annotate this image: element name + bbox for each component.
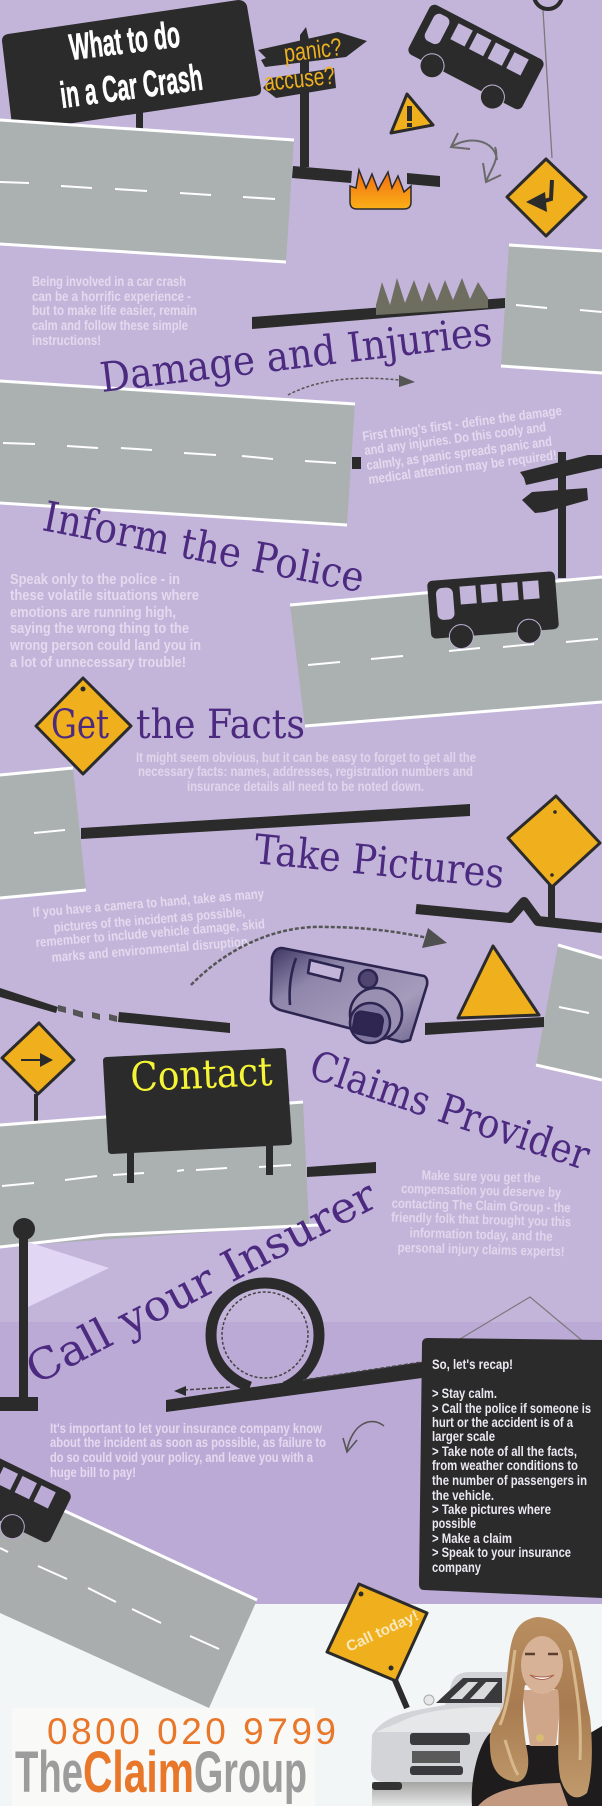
text: first thing's first: First thing's first - define the damage — [361, 403, 563, 444]
recap text: larger scale — [432, 1429, 495, 1444]
title text: What to do — [67, 14, 182, 68]
heading: Inform the Police: Inform the Police — [39, 492, 368, 602]
signpost: panic / accuse — [258, 27, 367, 167]
sign text: panic? — [282, 33, 343, 68]
recap text: > Take note of all the facts, — [432, 1444, 577, 1459]
diamond sign with post — [508, 796, 600, 918]
hanging string and ring — [534, 0, 562, 158]
recap text: > Speak to your insurance — [432, 1545, 571, 1560]
text: take pictures — [32, 886, 265, 965]
intro text: can be a horrific experience - — [32, 289, 191, 304]
recap text: company — [432, 1560, 481, 1575]
recap text: possible — [432, 1516, 476, 1531]
flag — [0, 1218, 109, 1411]
text: take pictures: pictures of the incident as possible, — [53, 904, 246, 935]
photo: woman — [472, 1617, 602, 1806]
bus: top tilted — [401, 3, 546, 122]
signpost silhouette — [520, 452, 602, 578]
text: speak to police: a lot of unnecessary trouble! — [10, 654, 186, 671]
orange triangle and ground — [425, 946, 544, 1035]
logo: The Claim Group — [15, 1740, 307, 1805]
text: first thing's first: medical attention may be required! — [367, 447, 558, 487]
call today sign — [327, 1584, 427, 1708]
road 5 — [0, 768, 86, 898]
heading: Take Pictures: Take Pictures — [252, 825, 507, 898]
text: first thing's first: calmly, as panic spreads panic and — [365, 434, 553, 473]
heading: Get the Facts: Get — [51, 702, 109, 748]
road 6 — [536, 945, 602, 1080]
recap text: > Stay calm. — [432, 1386, 497, 1401]
heading: Get the Facts: the Facts — [136, 702, 305, 748]
sign text — [263, 33, 343, 97]
text: contact claims provider — [391, 1167, 571, 1259]
text: speak to police: these volatile situations where — [10, 587, 199, 604]
loop the loop ramp — [166, 1283, 422, 1412]
text: take pictures: If you have a camera to hand, take as many — [32, 886, 265, 920]
background: white footer — [0, 1604, 602, 1806]
road 4 — [290, 577, 602, 727]
text: contact claims provider: information today, and the — [409, 1225, 553, 1244]
bus: bottom left — [0, 1438, 73, 1555]
recap text: hurt or the accident is of a — [432, 1415, 573, 1430]
call today text: Call today! — [344, 1607, 421, 1656]
black bar — [81, 804, 470, 839]
text: the facts: It might seem obvious, but it can be easy to forget to get all the — [136, 750, 476, 765]
text: speak to police — [9, 571, 201, 671]
text: speak to police: wrong person could land you in — [9, 637, 201, 654]
text: first thing's first: and any injuries. Do this cooly and — [363, 419, 547, 458]
road 2 — [501, 244, 602, 373]
ground bump line — [416, 902, 602, 928]
diamond sign: bent arrow — [507, 159, 586, 236]
fire pit — [292, 166, 440, 209]
background: lower purple band — [0, 1322, 602, 1605]
recap text — [432, 1357, 591, 1575]
photo: silver car — [371, 1672, 510, 1806]
text: contact claims provider: Make sure you get the — [421, 1167, 541, 1186]
logo: The Claim Group: The — [15, 1740, 83, 1805]
text: speak to police: saying the wrong thing to the — [10, 620, 189, 637]
intro text: calm and follow these simple — [32, 318, 188, 333]
recap board — [419, 1297, 602, 1598]
background: purple paper — [0, 0, 602, 1322]
recap text: > Make a claim — [432, 1531, 512, 1546]
curved arrows — [451, 133, 501, 182]
contact sign — [103, 1048, 292, 1183]
road 8 — [0, 1481, 257, 1708]
icon: camera — [271, 948, 427, 1043]
text: call your insurer — [50, 1421, 326, 1480]
text: call your insurer: huge bill to pay! — [50, 1465, 136, 1480]
recap text: > Take pictures where — [432, 1502, 551, 1517]
title sign — [2, 0, 261, 131]
logo panel — [12, 1708, 315, 1806]
recap text: So, let's recap! — [432, 1357, 513, 1372]
text: the facts — [136, 750, 476, 794]
text: call your insurer: do so could void your policy, and leave you with a — [50, 1450, 313, 1465]
heading: Call your Insurer: Call your Insurer — [18, 1170, 385, 1395]
text: contact claims provider: contacting The Claim Group - the — [391, 1196, 571, 1215]
text: call your insurer: It's important to let your insurance company know — [50, 1421, 322, 1436]
dashed arrow — [288, 375, 415, 395]
intro text: but to make life easier, remain — [32, 303, 197, 318]
logo: The Claim Group: Group — [194, 1740, 307, 1805]
text: take pictures: marks and environmental disruption. — [51, 934, 252, 965]
recap text: from weather conditions to — [432, 1458, 578, 1473]
text: the facts: necessary facts: names, addresses, registration numbers and — [138, 764, 473, 779]
contact text: Contact — [129, 1049, 273, 1101]
road 7 — [0, 1102, 319, 1247]
text: contact claims provider: friendly folk that brought you this — [391, 1210, 571, 1229]
title text: in a Car Crash — [58, 57, 205, 116]
heading: Get the Facts — [51, 702, 305, 748]
text: call your insurer: about the incident as soon as possible, as failure to — [50, 1435, 326, 1450]
dashed arrow — [191, 927, 447, 985]
text: the facts: insurance details all need to be noted down. — [187, 779, 424, 794]
intro text: instructions! — [32, 333, 101, 348]
bus: on road — [427, 571, 560, 651]
phone number: 0800 020 9799 — [47, 1711, 336, 1752]
logo: The Claim Group: Claim — [83, 1740, 194, 1805]
spiked bar — [252, 278, 505, 329]
text: contact claims provider: personal injury claims experts! — [397, 1240, 565, 1259]
text: contact claims provider: compensation you deserve by — [401, 1181, 562, 1200]
sign text: accuse? — [263, 62, 336, 97]
text: first thing's first — [361, 403, 563, 487]
heading: Damage and Injuries: Damage and Injuries — [97, 307, 494, 402]
curved arrow — [343, 1422, 384, 1452]
small diamond sign: arrow — [2, 1023, 74, 1121]
warning triangle — [391, 94, 433, 133]
dashed black road line — [0, 988, 230, 1033]
road 1 — [0, 119, 294, 262]
recap text: the vehicle. — [432, 1488, 494, 1503]
black bar — [307, 1162, 376, 1177]
intro text — [32, 274, 197, 348]
diamond sign: Get — [36, 678, 131, 774]
road 3 — [0, 380, 361, 525]
text: speak to police: Speak only to the police - in — [10, 571, 180, 588]
text: take pictures: remember to include vehicle damage, skid — [35, 916, 265, 950]
title text — [58, 14, 205, 116]
intro text: Being involved in a car crash — [32, 274, 186, 289]
text: speak to police: emotions are running high, — [10, 604, 176, 621]
